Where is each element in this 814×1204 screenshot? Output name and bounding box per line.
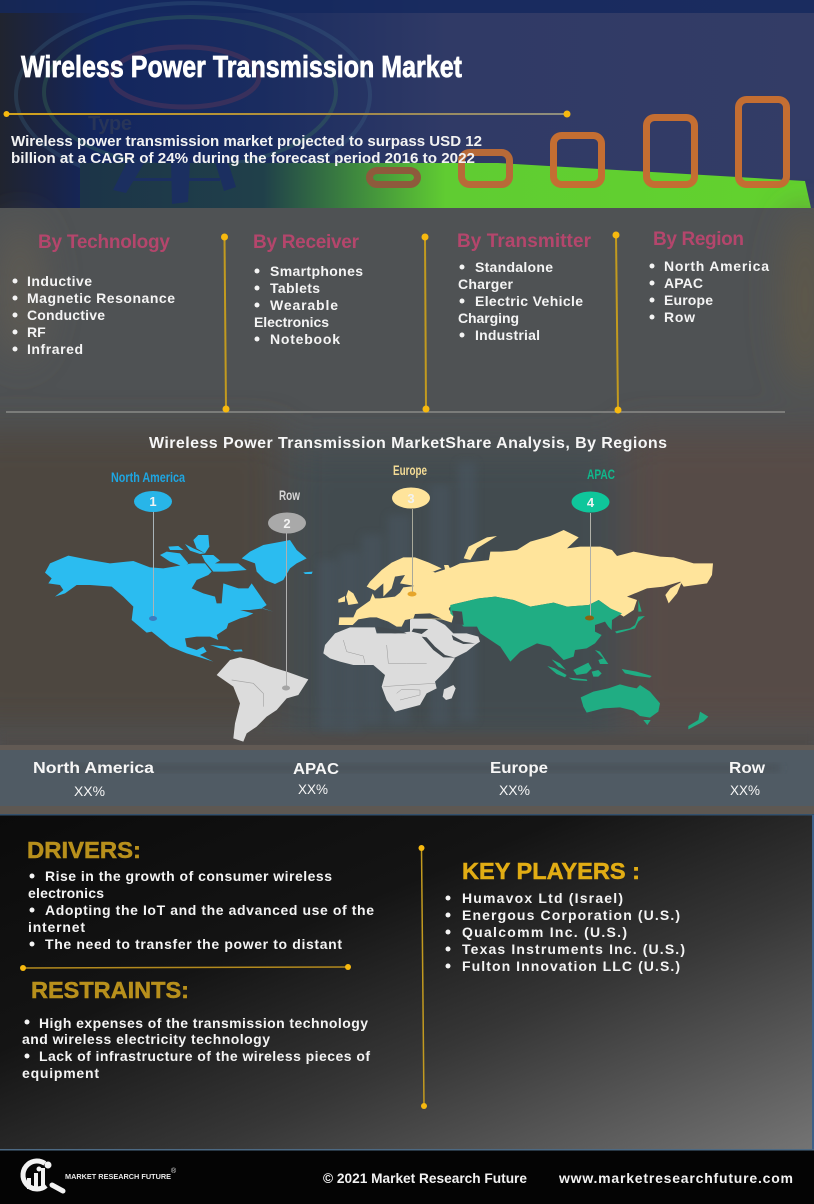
- icon: faint tower: [113, 160, 236, 204]
- list: Wearable: [270, 297, 338, 313]
- list: Texas Instruments Inc. (U.S.): [462, 941, 685, 957]
- summary text: [11, 134, 482, 167]
- list: Lack of infrastructure of the wireless pieces of: [39, 1048, 370, 1064]
- summary text: Wireless power transmission market projected to surpass USD 12: [11, 134, 482, 150]
- list: Adopting the IoT and the advanced use of the: [45, 902, 374, 918]
- section rule: [6, 411, 785, 413]
- heading: By Transmitter: [457, 231, 592, 252]
- panel: by transmitter: [457, 231, 592, 343]
- stat: North America: North America: [33, 760, 154, 777]
- list: [22, 1015, 370, 1081]
- heading: By Receiver: [253, 232, 360, 253]
- divider 2: [422, 234, 430, 412]
- divider: [20, 964, 351, 971]
- map pin 4: APAC: [572, 466, 615, 620]
- brand name: MARKET RESEARCH FUTURE: [65, 1172, 171, 1181]
- map pin 1: North America: North America: [111, 469, 185, 485]
- list: Electronics: [254, 314, 329, 330]
- list: [28, 868, 374, 952]
- panel: by region: [650, 229, 769, 325]
- list: Infrared: [27, 341, 83, 357]
- list: Fulton Innovation LLC (U.S.): [462, 958, 680, 974]
- panel: photo background middle: [0, 208, 814, 815]
- stat: North America: XX%: [74, 784, 105, 799]
- list: Conductive: [27, 307, 105, 323]
- list: Industrial: [475, 327, 540, 343]
- restraints: [22, 977, 370, 1081]
- icon: faint signal rings: [16, 3, 370, 187]
- drivers: [27, 837, 374, 952]
- stat: APAC: APAC: [293, 761, 339, 778]
- list: [446, 890, 685, 974]
- heading: By Region: [653, 229, 744, 250]
- panel: by receiver: [253, 232, 363, 347]
- list: Magnetic Resonance: [27, 290, 175, 306]
- map: North America: [45, 535, 313, 662]
- decorative faint bars: [318, 462, 476, 732]
- stat: Row: [729, 760, 766, 798]
- list: North America: [664, 258, 769, 274]
- map: South America: [217, 657, 308, 742]
- divider vertical: [418, 845, 427, 1109]
- label: faint background word: Type: [88, 113, 132, 135]
- title: Wireless Power Transmission Market: [21, 49, 462, 84]
- map: Africa and Middle East: [323, 617, 480, 712]
- stat: APAC: XX%: [298, 782, 328, 797]
- list: Humavox Ltd (Israel): [462, 890, 623, 906]
- key players: [446, 858, 685, 974]
- stat: Row: Row: [729, 760, 766, 777]
- list: [12, 273, 175, 357]
- map pin 2: Row: 2: [283, 516, 291, 531]
- list: equipment: [22, 1065, 99, 1081]
- list: Energous Corporation (U.S.): [462, 907, 680, 923]
- website: www.marketresearchfuture.com: [558, 1170, 793, 1186]
- heading: By Technology: [38, 232, 170, 253]
- panel: header banner: [0, 0, 814, 208]
- map pin 3: Europe: 3: [407, 491, 415, 506]
- list: internet: [28, 919, 85, 935]
- map pin 1: North America: 1: [149, 494, 157, 509]
- stat: Europe: [490, 760, 548, 798]
- list: [458, 259, 583, 343]
- list: and wireless electricity technology: [22, 1031, 270, 1047]
- heading: DRIVERS:: [27, 837, 141, 863]
- heading: KEY PLAYERS :: [462, 858, 640, 884]
- list: Row: [664, 309, 695, 325]
- heading: RESTRAINTS:: [31, 977, 189, 1003]
- stat: Europe: XX%: [499, 783, 530, 798]
- list: Qualcomm Inc. (U.S.): [462, 924, 627, 940]
- list: electronics: [28, 885, 104, 901]
- list: The need to transfer the power to distant: [45, 936, 342, 952]
- map pin 4: APAC: APAC: [587, 466, 615, 482]
- map pin 2: Row: Row: [279, 487, 300, 503]
- list: Europe: [664, 292, 713, 308]
- list: RF: [27, 324, 46, 340]
- panel: by technology: [12, 232, 175, 357]
- list: Charger: [458, 276, 514, 292]
- list: [650, 258, 769, 325]
- list: Rise in the growth of consumer wireless: [45, 868, 332, 884]
- map pin 4: APAC: 4: [587, 495, 595, 510]
- map pin 2: Row: [268, 487, 306, 690]
- summary text: billion at a CAGR of 24% during the forecast period 2016 to 2022: [11, 151, 475, 167]
- map pin 3: Europe: [392, 462, 430, 596]
- map: Asia Pacific: [450, 597, 708, 729]
- stat: APAC: [293, 761, 339, 797]
- registered mark: ®: [171, 1167, 177, 1175]
- stat: Row: XX%: [730, 783, 760, 798]
- map: Europe and Russia: [338, 530, 713, 627]
- list: [254, 263, 363, 347]
- stat: North America: [33, 760, 154, 799]
- list: Charging: [458, 310, 519, 326]
- list: Smartphones: [270, 263, 363, 279]
- chart heading: Wireless Power Transmission MarketShare Analysis, By Regions: [149, 435, 667, 452]
- map pin 1: North America: [111, 469, 185, 621]
- divider line with dots: [4, 110, 570, 118]
- list: High expenses of the transmission technology: [39, 1015, 368, 1031]
- stat: Europe: Europe: [490, 760, 548, 777]
- map pin 3: Europe: Europe: [393, 462, 427, 478]
- list: Electric Vehicle: [475, 293, 583, 309]
- divider 3: [612, 232, 622, 414]
- copyright: © 2021 Market Research Future: [323, 1170, 527, 1186]
- chart: growth bars: [370, 100, 786, 184]
- icon: logo magnifier with bars: [17, 1155, 63, 1195]
- footer: [0, 1149, 814, 1204]
- list: Tablets: [270, 280, 320, 296]
- list: Inductive: [27, 273, 92, 289]
- list: APAC: [664, 275, 703, 291]
- list: Notebook: [270, 331, 340, 347]
- panel: drivers, restraints and key players: [0, 814, 814, 1150]
- world map: [45, 530, 713, 742]
- divider 1: [221, 234, 230, 412]
- panel: regional share band: [0, 745, 814, 815]
- chart: green rising area: [80, 163, 811, 208]
- list: Standalone: [475, 259, 553, 275]
